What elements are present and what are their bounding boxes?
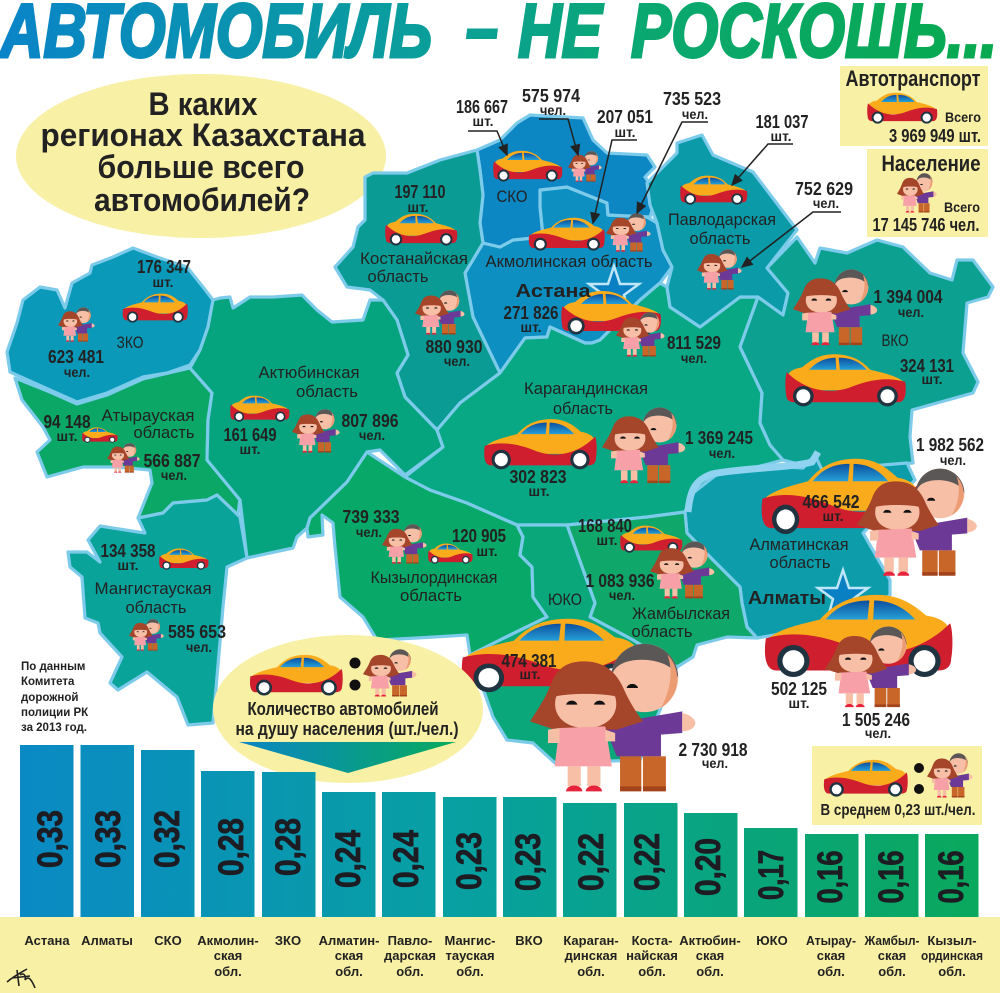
bar labels: ская	[878, 948, 906, 963]
bar chart: 0,23	[509, 833, 548, 891]
region values: шт.	[520, 319, 542, 335]
region values: чел.	[865, 725, 891, 741]
region: Aktobe	[190, 295, 443, 558]
region values: 474 381	[502, 651, 556, 671]
label band	[0, 917, 1000, 993]
region values: 302 823	[510, 467, 566, 487]
bar labels: дарская	[384, 948, 436, 963]
region: YKO	[470, 525, 677, 763]
bar chart: 0,33	[89, 810, 128, 868]
source note: Комитета	[21, 676, 75, 688]
bar chart: 0,17	[752, 850, 791, 900]
source note	[21, 661, 89, 734]
icon: star Astana	[589, 266, 639, 313]
region values: 186 667	[456, 97, 508, 117]
region values: шт.	[788, 695, 810, 711]
callout: average	[812, 746, 982, 825]
bar labels: обл.	[396, 964, 424, 979]
region values: шт.	[770, 128, 792, 144]
region labels: область	[770, 553, 831, 572]
region values: 176 347	[137, 257, 191, 277]
legend: vehicles: 3 969 949 шт.	[889, 126, 981, 146]
source note: дорожной	[21, 692, 78, 704]
bar labels: Павло-	[388, 933, 432, 948]
region labels: ЮКО	[548, 590, 582, 609]
region values: чел.	[356, 524, 382, 540]
region values: 811 529	[667, 333, 721, 353]
region values: чел.	[813, 195, 839, 211]
bar labels: обл.	[878, 964, 906, 979]
bar labels: ская	[696, 948, 724, 963]
region values: 324 131	[900, 356, 954, 376]
region labels: ЗКО	[116, 333, 144, 352]
region values: шт.	[118, 557, 138, 573]
region values: 271 826	[504, 303, 558, 323]
bar labels: ская	[214, 948, 242, 963]
region values: чел.	[161, 467, 187, 483]
region values: 807 896	[342, 411, 398, 431]
region values: 197 110	[394, 182, 446, 202]
region values: 735 523	[663, 89, 721, 109]
region: Kyzylorda	[307, 452, 547, 655]
question oval: автомобилей?	[94, 182, 310, 218]
region labels: Алматинская	[750, 535, 848, 554]
bar chart: 0,24	[329, 830, 368, 888]
region values: шт.	[614, 124, 636, 140]
region values: 1 394 004	[874, 287, 942, 307]
region values: 94 148	[44, 412, 90, 432]
region values: чел.	[186, 639, 212, 655]
bar chart: 0,22	[572, 833, 611, 891]
signature	[7, 969, 35, 988]
bar labels: ЮКО	[756, 933, 788, 948]
bar chart: 0,24	[387, 830, 426, 888]
bar labels: Актюбин-	[679, 933, 741, 948]
region values: чел.	[709, 445, 735, 461]
icon: star Almaty	[818, 570, 868, 617]
legend: population: Население	[882, 151, 980, 176]
lake Balkhash	[688, 452, 818, 512]
region values: 134 358	[100, 541, 156, 561]
region values: шт.	[528, 483, 550, 499]
bar labels: обл.	[817, 964, 845, 979]
region values: 739 333	[342, 507, 400, 527]
bar labels: обл.	[938, 964, 966, 979]
title	[0, 0, 997, 74]
bar chart: 0,16	[811, 850, 850, 904]
bar chart	[20, 745, 978, 917]
bar labels: ская	[817, 948, 845, 963]
region values: чел.	[540, 102, 566, 118]
question oval	[16, 74, 386, 238]
map of Kazakhstan	[7, 115, 993, 763]
region labels: СКО	[496, 187, 528, 206]
region values: чел.	[702, 755, 728, 771]
legend: population	[867, 149, 988, 237]
region values: 623 481	[48, 347, 104, 367]
bar labels: обл.	[456, 964, 484, 979]
region: Akmola	[465, 187, 672, 373]
region values: 1 369 245	[685, 428, 753, 448]
region values: 752 629	[795, 179, 853, 199]
bar labels: тауская	[445, 948, 495, 963]
region values: шт.	[240, 441, 260, 457]
region values: шт.	[472, 113, 494, 129]
bar labels: Жамбыл-	[864, 933, 920, 948]
question oval: регионах Казахстана	[40, 117, 366, 153]
leader arrows	[468, 119, 841, 267]
region values: 1 505 246	[842, 710, 910, 730]
region labels: Акмолинская область	[486, 252, 653, 271]
region: Zhambyl	[567, 512, 757, 667]
region: Kostanay	[335, 150, 500, 430]
region labels: область	[690, 229, 751, 248]
source note: за 2013 год.	[21, 722, 87, 734]
region values: 120 905	[452, 526, 506, 546]
bar labels: ская	[335, 948, 363, 963]
region values: 575 974	[522, 86, 580, 106]
bar labels: Коста-	[632, 933, 672, 948]
bar labels: Акмолин-	[197, 933, 259, 948]
question oval: В каких	[148, 86, 258, 122]
region: SKO	[477, 115, 657, 247]
region values: чел.	[444, 353, 470, 369]
region values: шт.	[822, 508, 844, 524]
bar labels: Алматы	[81, 933, 133, 948]
bar labels: Мангис-	[444, 933, 496, 948]
bar chart: 0,23	[450, 832, 489, 890]
region values: чел.	[681, 350, 707, 366]
region labels: ВКО	[882, 331, 908, 350]
region: Mangistau	[68, 495, 247, 725]
region values: чел.	[359, 427, 385, 443]
region values: 1 083 936	[586, 571, 654, 591]
bar labels: Астана	[24, 933, 70, 948]
region values: шт.	[152, 274, 174, 290]
bar labels: СКО	[154, 933, 182, 948]
bar labels: найская	[626, 948, 678, 963]
region labels: область	[553, 399, 613, 418]
callout: cars per capita: на душу населения (шт./чел.)	[236, 719, 459, 739]
region labels: область	[400, 586, 462, 605]
region: Almaty oblast	[685, 455, 915, 638]
bar chart: 0,33	[31, 810, 70, 868]
region: VKO	[740, 237, 993, 470]
source note: По данным	[21, 661, 85, 673]
bar labels: обл.	[577, 964, 605, 979]
region values: чел.	[682, 106, 708, 122]
region values: 502 125	[771, 679, 827, 699]
bar chart: 0,28	[212, 818, 251, 876]
region: Karaganda	[405, 283, 783, 525]
region: Atyrau	[15, 368, 240, 518]
bar chart: 0,32	[148, 810, 187, 868]
bar labels: динская	[565, 948, 617, 963]
region values: 566 887	[144, 451, 200, 471]
bar chart: 0,28	[269, 818, 308, 876]
region values: Астана	[516, 281, 592, 301]
region values: чел.	[940, 452, 966, 468]
region labels	[94, 187, 908, 641]
region values: чел.	[64, 364, 90, 380]
region: Pavlodar	[647, 135, 797, 327]
region labels: область	[632, 622, 693, 641]
region labels: Костанайская	[360, 249, 468, 268]
region labels: Жамбылская	[632, 604, 730, 623]
region values: 161 649	[224, 425, 276, 445]
region labels: Мангистауская	[94, 579, 212, 598]
region values: 466 542	[802, 492, 860, 512]
bar labels: Караган-	[563, 933, 619, 948]
region values: 880 930	[426, 337, 482, 357]
bar labels: обл.	[638, 964, 666, 979]
bar chart: 0,20	[689, 838, 728, 896]
region: ZKO	[7, 248, 213, 402]
bar labels: Алматин-	[319, 933, 379, 948]
region labels: Атырауская	[102, 406, 194, 425]
region values: шт.	[520, 666, 540, 682]
bar labels: Атырау-	[806, 933, 856, 948]
region values: Алматы	[748, 588, 826, 608]
bar labels: обл.	[214, 964, 242, 979]
region labels: область	[368, 267, 429, 286]
cars and people on map	[58, 151, 977, 791]
region labels: область	[296, 382, 358, 401]
bar labels	[24, 933, 983, 979]
region labels: Кызылординская	[370, 568, 498, 587]
region values: шт.	[408, 199, 428, 215]
legend: population: Всего	[944, 199, 980, 215]
region values	[44, 86, 984, 771]
region values: 2 730 918	[678, 740, 748, 760]
region values: шт.	[476, 543, 498, 559]
bar labels: Кызыл-	[927, 933, 977, 948]
bar labels: ВКО	[515, 933, 543, 948]
region values: чел.	[898, 304, 924, 320]
callout: cars per capita: Количество автомобилей	[248, 699, 438, 719]
bar chart: 0,22	[628, 833, 667, 891]
question oval: больше всего	[98, 149, 304, 185]
region values: шт.	[56, 428, 78, 444]
bar labels: ЗКО	[275, 933, 301, 948]
region labels: Карагандинская	[524, 379, 648, 398]
region values: шт.	[922, 371, 942, 387]
bar chart: 0,16	[872, 850, 911, 904]
region values: 585 653	[168, 622, 226, 642]
callout: cars per capita	[213, 635, 483, 783]
legend: vehicles	[840, 66, 988, 146]
region values: 181 037	[756, 112, 808, 132]
region labels: Павлодарская	[668, 210, 776, 229]
region values: 168 840	[578, 516, 632, 536]
legend: vehicles: Всего	[945, 109, 981, 125]
bar labels: ординская	[921, 948, 983, 963]
region values: 1 982 562	[916, 435, 984, 455]
source note: полиции РК	[21, 707, 89, 719]
region labels: область	[134, 423, 195, 442]
region labels: Актюбинская	[258, 363, 360, 382]
region labels: область	[126, 598, 187, 617]
bar labels: обл.	[335, 964, 363, 979]
bar labels: обл.	[696, 964, 724, 979]
region values: чел.	[609, 587, 635, 603]
region values: 207 051	[597, 107, 653, 127]
region values: шт.	[596, 532, 618, 548]
bar chart: 0,16	[932, 850, 971, 904]
